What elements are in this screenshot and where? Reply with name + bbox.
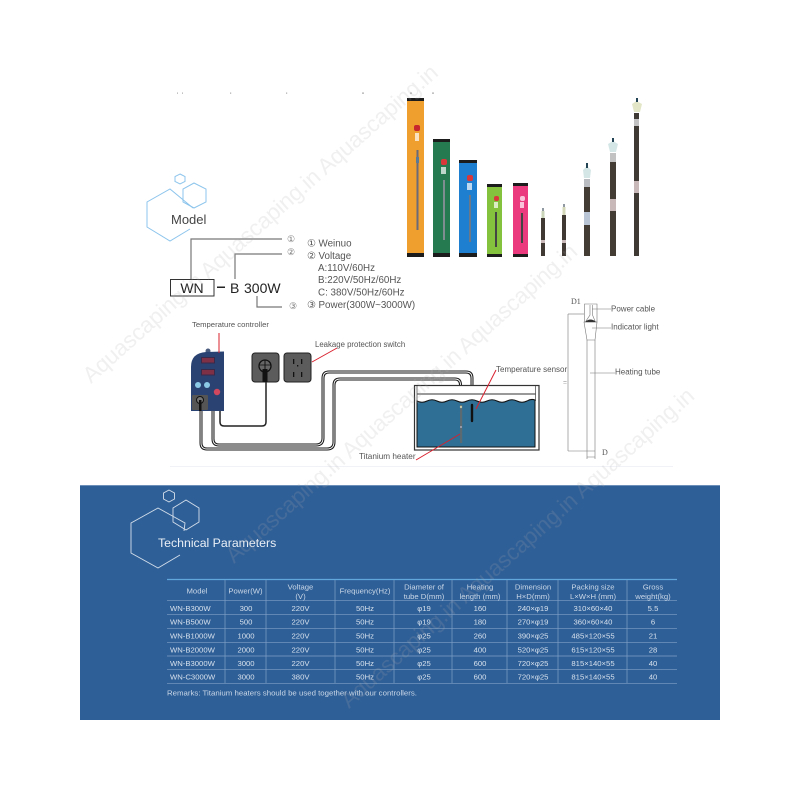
box: green <box>433 139 450 257</box>
table row: WN-B300W: 160 <box>474 604 486 613</box>
table row: WN-C3000W: 380V <box>292 673 310 682</box>
heater: 3000W <box>632 98 642 256</box>
table row: WN-B1000W: 260 <box>474 632 486 641</box>
table row: WN-B500W: 360×60×40 <box>574 618 612 627</box>
drawing labels <box>611 304 661 376</box>
dimension labels <box>563 297 608 457</box>
model code: B 300W: B <box>230 280 239 296</box>
table row: WN-B2000W: WN-B2000W <box>170 645 216 654</box>
table row: WN-B2000W: 400 <box>474 645 486 654</box>
table grid <box>167 580 677 683</box>
box: pink <box>513 183 528 257</box>
table row: WN-B2000W: 220V <box>292 645 310 654</box>
model legend: C: 380V/50Hz/60Hz <box>318 288 405 298</box>
table row: WN-B500W: 270×φ19 <box>518 618 548 627</box>
table row: WN-B2000W: φ25 <box>417 645 431 654</box>
model legend: B:220V/50Hz/60Hz <box>318 275 401 286</box>
heater outline <box>568 304 615 459</box>
table row: WN-B1000W: 220V <box>292 632 310 641</box>
table row: WN-B500W: WN-B500W <box>170 618 211 627</box>
model legend: ② Voltage <box>307 251 352 262</box>
pointer: leakage switch <box>312 348 337 362</box>
table row: WN-C3000W: φ25 <box>417 673 431 682</box>
table row: WN-C3000W: 815×140×55 <box>571 673 615 682</box>
table row: WN-B1000W: 485×120×55 <box>571 632 615 641</box>
table row: WN-C3000W: 50Hz <box>356 673 374 682</box>
table row: WN-B3000W: 3000 <box>237 659 255 668</box>
table row: WN-B500W: 220V <box>292 618 310 627</box>
remarks note: Remarks: Titanium heaters should be used together with our controllers. <box>167 688 417 698</box>
table header: weight(kg) <box>634 592 671 601</box>
label: titanium heater: Titanium heater <box>359 452 416 461</box>
panel: technical parameters <box>80 485 720 720</box>
model code: B 300W <box>217 280 281 296</box>
dimension labels: D1 <box>571 297 581 306</box>
table row: WN-B500W: 50Hz <box>356 618 374 627</box>
callout numbers: ② <box>287 247 295 257</box>
pointer: titanium heater <box>416 434 460 460</box>
table header: Packing size <box>571 582 615 592</box>
table: parameters <box>167 580 677 683</box>
box: blue <box>459 160 477 257</box>
label: temperature sensor: Temperature sensor <box>496 365 567 374</box>
table row: WN-B1000W: 21 <box>649 632 657 641</box>
watermark: middle line: Aquascaping.in Aquascaping.in Aquascaping.in <box>221 239 582 568</box>
table row: WN-B3000W: 50Hz <box>356 659 374 668</box>
box: orange <box>407 98 424 257</box>
label: temperature controller: Temperature controller <box>192 320 269 329</box>
leakage protection outlet <box>284 353 311 382</box>
table row: WN-C3000W: 40 <box>649 673 657 682</box>
table header: Voltage <box>288 582 313 592</box>
callout numbers <box>287 234 297 311</box>
table row: WN-B1000W: 1000 <box>237 632 255 641</box>
cable: controller to socket <box>220 380 266 426</box>
model code: WN box: WN <box>180 280 204 296</box>
table row: WN-B3000W <box>170 659 657 668</box>
table row: WN-B300W: 300 <box>240 604 252 613</box>
table row: WN-B300W: 310×60×40 <box>574 604 612 613</box>
dimension labels: D <box>602 448 608 457</box>
table row: WN-B2000W: 2000 <box>237 645 255 654</box>
table header <box>187 582 671 601</box>
cable: controller to sensor <box>213 372 472 445</box>
pointer: temperature sensor <box>476 370 496 409</box>
box: lime <box>487 184 502 257</box>
cable: controller to heater <box>201 379 460 449</box>
label: leakage protection switch: Leakage protection switch <box>315 340 405 349</box>
model legend: ③ Power(300W~3000W) <box>307 300 415 311</box>
table row: WN-B3000W: φ25 <box>417 659 431 668</box>
table row: WN-B300W: 220V <box>292 604 310 613</box>
table row: WN-C3000W: 720×φ25 <box>518 673 548 682</box>
table header: Model <box>187 586 208 596</box>
table row: WN-B2000W: 520×φ25 <box>518 645 548 654</box>
table header: Heating <box>467 582 493 592</box>
table row: WN-C3000W <box>170 673 657 682</box>
model code: B 300W: 300W <box>244 280 281 296</box>
table row: WN-C3000W: WN-C3000W <box>170 673 216 682</box>
table row: WN-B2000W: 615×120×55 <box>571 645 615 654</box>
dimension labels: = <box>563 379 567 387</box>
table row: WN-B300W: 50Hz <box>356 604 374 613</box>
table row: WN-B300W: WN-B300W <box>170 604 211 613</box>
table row: WN-C3000W: 3000 <box>237 673 255 682</box>
table row: WN-B3000W: 40 <box>649 659 657 668</box>
heater dimension drawing <box>563 297 661 459</box>
table row: WN-B300W: 240×φ19 <box>518 604 548 613</box>
aquarium tank <box>414 386 539 450</box>
table header: Dimension <box>515 582 551 592</box>
table row: WN-B2000W: 50Hz <box>356 645 374 654</box>
table row: WN-B1000W: 50Hz <box>356 632 374 641</box>
table row: WN-B500W: 180 <box>474 618 486 627</box>
table header: L×W×H (mm) <box>570 592 617 601</box>
table header: Diameter of <box>404 582 445 592</box>
table row: WN-B1000W: φ25 <box>417 632 431 641</box>
heater: 500W <box>562 204 566 256</box>
drawing labels: Indicator light <box>611 322 659 332</box>
table row: WN-B3000W: 815×140×55 <box>571 659 615 668</box>
table row: WN-B1000W: 390×φ25 <box>518 632 548 641</box>
table row: WN-B500W: 500 <box>240 618 252 627</box>
model code diagram <box>170 234 415 311</box>
heading: Model: Model <box>171 212 207 227</box>
pointer: temperature controller <box>218 333 220 353</box>
table row: WN-B300W <box>170 604 658 613</box>
table row: WN-B300W: 5.5 <box>648 604 658 613</box>
table header: Frequency(Hz) <box>340 586 391 596</box>
heading: Technical Parameters: Technical Parameters <box>158 536 276 550</box>
heater: 300W <box>541 208 545 256</box>
model connector lines <box>191 239 282 307</box>
model legend: A:110V/60Hz <box>318 263 375 274</box>
model code: WN box <box>170 280 214 296</box>
drawing labels: Heating tube <box>615 368 661 376</box>
icon: model hexagons <box>147 174 206 241</box>
product photo: boxes and heaters <box>407 98 642 257</box>
table row: WN-B500W: φ19 <box>417 618 431 627</box>
table header: (V) <box>295 592 306 601</box>
heater: 2000W <box>608 138 618 256</box>
callout numbers: ① <box>287 234 295 244</box>
table row: WN-B3000W: 220V <box>292 659 310 668</box>
wiring diagram <box>191 320 567 461</box>
heater: 1000W <box>583 163 591 256</box>
drawing labels: Power cable <box>611 304 656 314</box>
table header: Gross <box>643 582 663 592</box>
model legend <box>307 238 415 311</box>
icon: parameters hexagons <box>131 490 199 568</box>
table row: WN-B500W: 6 <box>651 618 655 627</box>
table row: WN-B500W <box>170 618 655 627</box>
callout numbers: ③ <box>289 301 297 311</box>
table header: length (mm) <box>459 592 501 601</box>
table header: H×D(mm) <box>516 592 550 601</box>
table row: WN-B1000W <box>170 632 657 641</box>
temperature sensor probe <box>471 405 473 421</box>
watermark: upper line: Aquascaping.in Aquascaping.in Aquascaping.in <box>78 60 443 388</box>
table header: Power(W) <box>228 586 263 596</box>
table row: WN-B2000W <box>170 645 657 654</box>
model legend: ① Weinuo <box>307 238 352 250</box>
table row: WN-B3000W: WN-B3000W <box>170 659 216 668</box>
titanium heater in tank <box>460 405 462 443</box>
table row: WN-B2000W: 28 <box>649 645 657 654</box>
table header: tube D(mm) <box>404 592 445 601</box>
temperature controller <box>191 348 224 411</box>
table row: WN-B300W: φ19 <box>417 604 431 613</box>
watermarks <box>78 60 699 713</box>
watermark: lower line: Aquascaping.in Aquascaping.in Aquascaping.in <box>336 383 699 713</box>
table row: WN-B1000W: WN-B1000W <box>170 632 216 641</box>
table row: WN-B3000W: 600 <box>474 659 486 668</box>
table row: WN-B3000W: 720×φ25 <box>518 659 548 668</box>
wall socket with plug <box>252 353 279 382</box>
table row: WN-C3000W: 600 <box>474 673 486 682</box>
